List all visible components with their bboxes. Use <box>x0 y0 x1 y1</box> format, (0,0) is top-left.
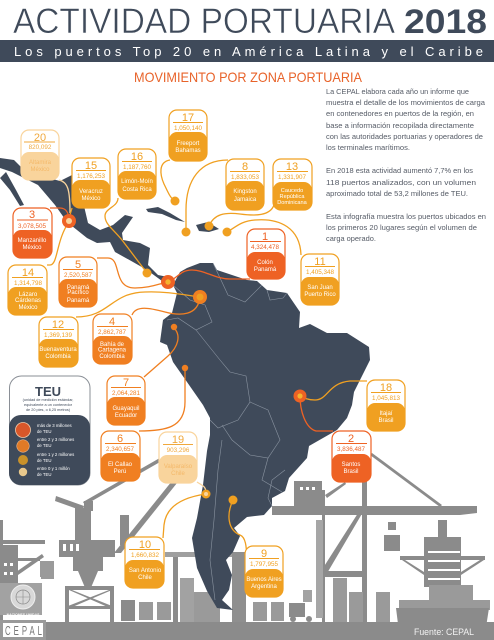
central structure <box>165 552 246 622</box>
card 7 Guayaquil: 2,064,281 <box>112 390 141 397</box>
port markers <box>62 196 306 504</box>
intro text: Esta infografía muestra los puertos ubicados en <box>326 212 486 221</box>
country borders <box>167 263 287 600</box>
card 5 Panama Pacifico: Pacífico <box>67 290 89 296</box>
port industrial silhouette <box>0 453 494 640</box>
card 20 Altamira: Altamira <box>29 160 52 166</box>
card 1 Colon: 1 <box>262 231 268 243</box>
logo: Naciones Unidas: NACIONES UNIDAS <box>7 613 40 617</box>
card 17 Freeport: Freeport <box>177 141 200 147</box>
source note: Fuente: CEPAL <box>414 627 474 638</box>
card 7 Guayaquil: 7 <box>123 377 129 389</box>
container ship <box>396 520 494 640</box>
card 6 El Callao: El Callao <box>108 462 133 468</box>
card 19 Valparaiso: Chile <box>171 471 185 477</box>
card 3 Manzanillo: 3 <box>29 209 35 221</box>
card 20 Altamira <box>21 130 59 180</box>
card 14 Lazaro Cardenas <box>8 265 47 315</box>
card 15 Veracruz: 1,176,253 <box>77 173 106 180</box>
card 6 El Callao: Perú <box>114 469 126 475</box>
intro text: carga operado. <box>326 234 376 243</box>
card 20 Altamira: 20 <box>34 132 46 144</box>
intro text: los terminales marítimos. <box>326 143 410 152</box>
card 9 Buenos Aires: 9 <box>261 548 267 560</box>
panel: TEU legend: entre 0 y 1 millón <box>37 466 70 471</box>
card 7 Guayaquil <box>107 376 145 425</box>
intro text: con las autoridades portuarias y operadores de <box>326 132 483 141</box>
card 8 Kingston: Jamaica <box>234 197 257 203</box>
card 3 Manzanillo <box>13 208 52 258</box>
card 3 Manzanillo: México <box>22 245 42 251</box>
panel: TEU legend: entre 2 y 3 millones <box>37 437 74 442</box>
logo: CEPAL: CEPAL <box>5 624 45 639</box>
card 4 Bahia de Cartagena: Colombia <box>99 354 125 360</box>
card 17 Freeport: 1,050,140 <box>174 125 203 132</box>
card 5 Panama Pacifico <box>59 257 97 307</box>
intro text: en contenedores en puertos de la región, en <box>326 109 474 118</box>
card 18 Itajai: Itajaí <box>379 411 393 417</box>
card 16 Limon-Moin: 16 <box>131 151 143 163</box>
panel: TEU legend: de TEU <box>37 429 52 434</box>
card 2 Santos: 3,836,487 <box>337 446 366 453</box>
card 15 Veracruz: 15 <box>85 160 97 172</box>
card 3 Manzanillo: Manzanillo <box>18 238 47 244</box>
card 4 Bahia de Cartagena: 4 <box>109 316 115 328</box>
card 8 Kingston <box>226 159 264 210</box>
card 14 Lazaro Cardenas: 14 <box>22 267 34 279</box>
card 4 Bahia de Cartagena: 2,862,787 <box>98 329 127 336</box>
intro text: En 2018 esta actividad aumentó 7,7% en los <box>326 166 473 175</box>
card 13 Caucedo: República <box>280 194 305 200</box>
card 8 Kingston: 1,833,053 <box>231 174 260 181</box>
card 6 El Callao <box>101 431 140 481</box>
card 10 San Antonio: 10 <box>139 539 151 551</box>
card 12 Buenaventura <box>39 317 78 367</box>
card 10 San Antonio: 1,660,832 <box>131 552 160 559</box>
panel: TEU legend: TEU <box>35 384 61 399</box>
title: ACTIVIDAD PORTUARIA <box>13 2 396 41</box>
card 16 Limon-Moin: Limón-Moín <box>121 179 153 185</box>
card 11 San Juan: 11 <box>314 256 326 268</box>
subtitle band <box>0 40 494 62</box>
card 10 San Antonio: San Antonio <box>129 568 162 574</box>
intro text <box>326 87 486 243</box>
card 8 Kingston: 8 <box>242 161 248 173</box>
card 2 Santos: 2 <box>348 433 354 445</box>
card 2 Santos <box>332 431 371 482</box>
panel: TEU legend: de TEU <box>37 472 52 477</box>
card 10 San Antonio <box>125 537 164 588</box>
panel: TEU legend: entre 1 y 2 millones <box>37 452 74 457</box>
card 13 Caucedo: Dominicana <box>277 200 308 206</box>
card 5 Panama Pacifico: Panamá <box>67 298 90 304</box>
intro text: La CEPAL elabora cada año un informe que <box>326 87 469 96</box>
panel: TEU legend <box>9 376 90 485</box>
map: South America <box>160 263 370 610</box>
card 3 Manzanillo: 3,078,505 <box>18 223 47 230</box>
subtitle band: Los puertos Top 20 en América Latina y el Caribe <box>14 44 483 59</box>
card 5 Panama Pacifico: 5 <box>75 259 81 271</box>
card 9 Buenos Aires: Buenos Aires <box>246 577 282 583</box>
card 18 Itajai: 18 <box>380 382 392 394</box>
card 18 Itajai <box>367 380 405 431</box>
intro text: muestra el detalle de los movimientos de carga <box>326 98 486 107</box>
card 4 Bahia de Cartagena: Cartagena <box>98 348 127 354</box>
left building <box>0 520 54 620</box>
card 16 Limon-Moin: 1,187,760 <box>123 164 152 171</box>
card 4 Bahia de Cartagena: Bahía de <box>100 342 125 348</box>
connector lines <box>47 160 367 570</box>
card 19 Valparaiso: Valparaíso <box>164 464 193 470</box>
card 9 Buenos Aires: Argentina <box>251 584 278 590</box>
card 17 Freeport <box>169 110 207 161</box>
card 1 Colon: Colón <box>257 260 273 266</box>
card 5 Panama Pacifico: Panamá <box>67 285 90 291</box>
card 18 Itajai: 1,045,813 <box>372 395 401 402</box>
card 2 Santos: Santos <box>342 462 360 468</box>
card 12 Buenaventura: 1,369,139 <box>44 332 73 339</box>
panel: TEU legend: de 20 pies, o 6,25 metros) <box>26 408 71 412</box>
quay crane <box>272 453 477 622</box>
section heading: MOVIMIENTO POR ZONA PORTUARIA <box>134 69 363 85</box>
card 4 Bahia de Cartagena <box>93 314 132 364</box>
card 11 San Juan: San Juan <box>307 285 333 291</box>
panel: TEU legend: (unidad de medición estándar, <box>23 398 73 402</box>
card 12 Buenaventura: Colombia <box>45 354 71 360</box>
card 6 El Callao: 6 <box>117 433 123 445</box>
card 12 Buenaventura: Buenaventura <box>39 347 77 353</box>
card 19 Valparaiso: 19 <box>172 434 184 446</box>
card 12 Buenaventura: 12 <box>52 319 64 331</box>
logo: Naciones Unidas <box>7 585 40 617</box>
card 11 San Juan: Puerto Rico <box>304 292 336 298</box>
map: Mexico, Central America and Caribbean <box>0 158 370 610</box>
panel: TEU legend: de TEU <box>37 458 52 463</box>
card 6 El Callao: 2,340,657 <box>106 446 135 453</box>
card 13 Caucedo: 1,331,907 <box>278 174 307 181</box>
card 5 Panama Pacifico: 2,520,587 <box>64 272 93 279</box>
intro text: base a información recopilada directamente <box>326 121 474 130</box>
card 16 Limon-Moin <box>118 149 156 199</box>
card 8 Kingston: Kingston <box>233 189 257 195</box>
card 15 Veracruz: Veracruz <box>79 189 103 195</box>
card 11 San Juan: 1,405,348 <box>306 269 335 276</box>
card 15 Veracruz <box>72 158 110 208</box>
card 7 Guayaquil: Guayaquil <box>112 406 140 412</box>
card 20 Altamira: 820,092 <box>29 144 52 151</box>
train and containers <box>41 564 171 621</box>
card 1 Colon <box>247 229 285 279</box>
card 13 Caucedo: 13 <box>286 161 298 173</box>
card 14 Lazaro Cardenas: México <box>18 305 38 311</box>
trucks <box>253 590 312 622</box>
card 1 Colon: Panamá <box>254 267 277 273</box>
card 9 Buenos Aires: 1,797,955 <box>250 561 279 568</box>
card 14 Lazaro Cardenas: Cárdenas <box>15 298 41 304</box>
panel: TEU legend: equivalente a un contenedor <box>24 403 73 407</box>
card 16 Limon-Moin: Costa Rica <box>122 187 152 193</box>
title: 2018 <box>404 3 487 41</box>
card 11 San Juan <box>301 254 339 305</box>
card 17 Freeport: 17 <box>182 112 194 124</box>
card 1 Colon: 4,324,478 <box>251 244 280 251</box>
intro text: aproximado total de 53,2 millones de TEU. <box>326 189 468 198</box>
card 15 Veracruz: México <box>81 196 101 202</box>
left crane <box>55 455 177 622</box>
card 9 Buenos Aires <box>245 546 283 597</box>
card 13 Caucedo <box>273 159 312 210</box>
card 19 Valparaiso: 903,296 <box>167 447 190 454</box>
card 10 San Antonio: Chile <box>138 575 152 581</box>
intro text: 118 puertos analizados, con un volumen <box>326 178 476 187</box>
card 18 Itajai: Brasil <box>378 418 394 424</box>
card 2 Santos: Brasil <box>343 469 359 475</box>
card 20 Altamira: México <box>30 167 50 173</box>
panel: TEU legend: más de 3 millones <box>37 423 72 428</box>
card 7 Guayaquil: Ecuador <box>115 413 137 419</box>
card 17 Freeport: Bahamas <box>175 148 201 154</box>
card 14 Lazaro Cardenas: 1,314,798 <box>14 280 43 287</box>
ground <box>45 622 494 640</box>
card 19 Valparaiso <box>159 432 197 483</box>
card 13 Caucedo: Caucedo <box>281 188 303 194</box>
intro text: los primeros 20 lugares según el volumen de <box>326 223 477 232</box>
panel: TEU legend: de TEU <box>37 443 52 448</box>
card 14 Lazaro Cardenas: Lázaro <box>19 292 38 298</box>
